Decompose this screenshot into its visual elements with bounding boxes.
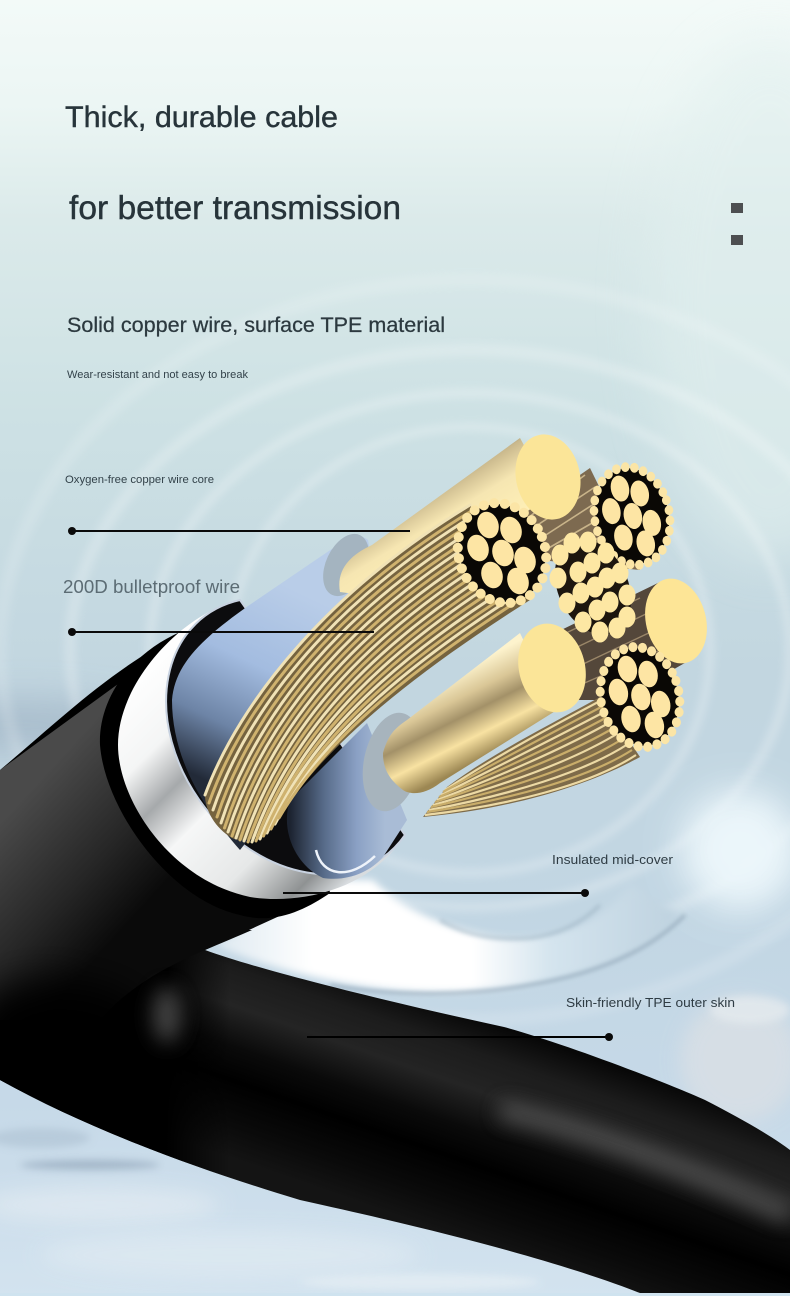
icon: small square markers: [731, 203, 743, 245]
ferrule interior: [166, 600, 405, 874]
lower solid conductor: [354, 616, 595, 817]
callout: skin-friendly TPE outer skin: [307, 995, 735, 1041]
callout: oxygen-free copper wire core: Oxygen-free copper wire core: [65, 474, 214, 486]
right solid conductor: [520, 572, 716, 700]
description: Wear-resistant and not easy to break: [67, 369, 248, 381]
black cable body: [0, 600, 790, 1296]
main stranded copper bundle: [205, 490, 561, 842]
centre stranded conductor: [540, 527, 646, 647]
top solid copper conductor: [339, 438, 565, 600]
top conductor end face: [508, 428, 588, 526]
bright ripple under the ferrule: [215, 880, 680, 992]
black collar: [100, 628, 330, 918]
callout: oxygen-free copper wire core: [65, 474, 410, 535]
callout: skin-friendly TPE outer skin: Skin-friendly TPE outer skin: [566, 995, 735, 1010]
upper blue sheath: [172, 527, 390, 850]
callout: 200D bulletproof wire: 200D bulletproof wire: [63, 577, 240, 597]
lower blue sheath: [287, 723, 407, 879]
metal ferrule ring: [118, 600, 405, 899]
heading line 1: Thick, durable cable: [65, 101, 338, 134]
lower stranded conductor: [423, 634, 693, 817]
callout: insulated mid-cover: [283, 852, 674, 897]
upper right stranded conductor: [522, 454, 683, 578]
heading line 2: for better transmission: [69, 189, 401, 226]
callout: 200D bulletproof wire: [63, 577, 374, 636]
callout: insulated mid-cover: Insulated mid-cover: [552, 852, 674, 867]
subheading: Solid copper wire, surface TPE material: [67, 314, 445, 337]
